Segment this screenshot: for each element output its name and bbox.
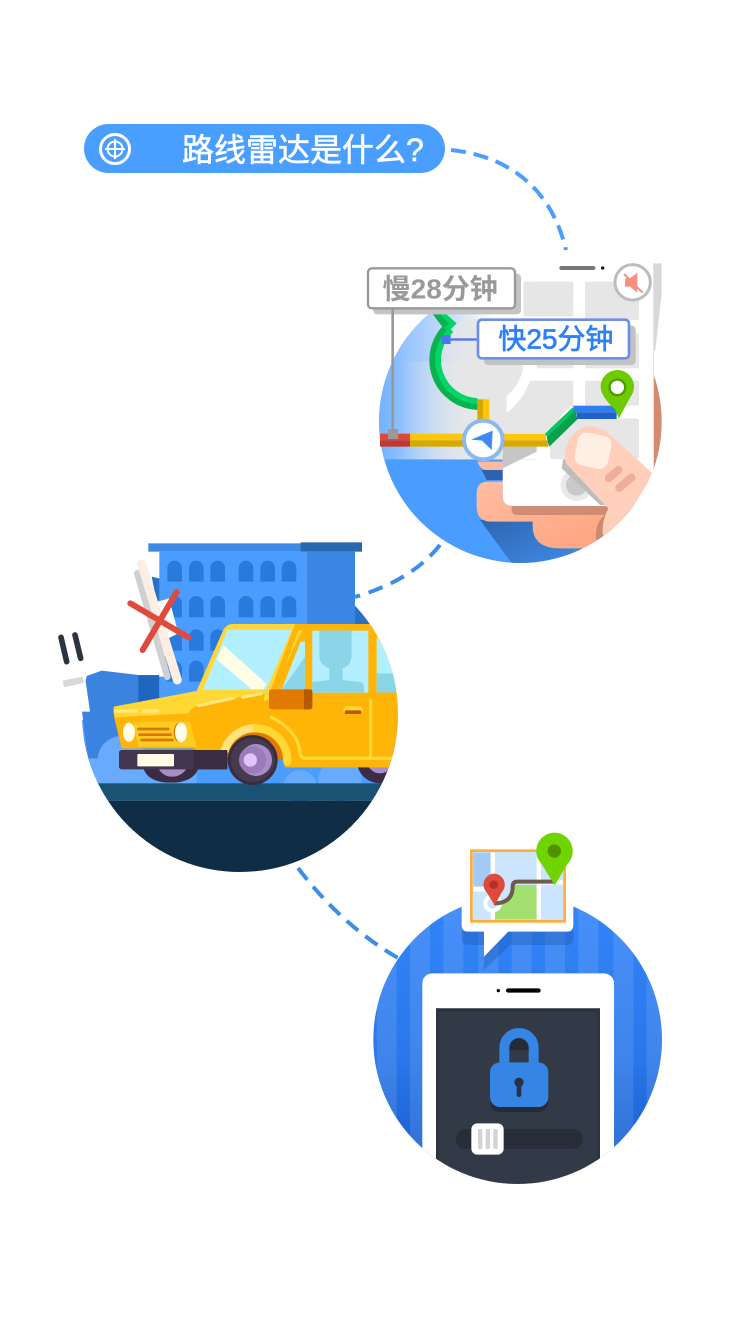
phone body	[422, 973, 614, 1207]
label: fast route	[442, 320, 636, 365]
hood highlights	[198, 694, 261, 706]
door lines	[270, 699, 400, 758]
dashed connector: title to navigation	[451, 150, 566, 250]
windshield	[203, 630, 292, 690]
wheel arch	[224, 728, 287, 762]
icon: navigation arrow	[464, 421, 503, 459]
dashed connector: navigation to car	[355, 545, 440, 597]
title text: 路线雷达是什么?	[182, 132, 424, 168]
dashed connector: car to lock screen	[298, 868, 398, 958]
white flag wedge	[157, 598, 178, 677]
grille	[138, 729, 173, 740]
panel: car in traffic	[50, 542, 417, 877]
grille frame	[133, 722, 197, 747]
map	[471, 851, 565, 921]
icon: destination pin	[601, 370, 634, 419]
label: slow route: 慢28分钟	[383, 274, 498, 305]
hand	[477, 426, 653, 548]
car body	[114, 624, 403, 767]
panel: lock screen	[370, 833, 667, 1207]
sign post	[137, 564, 177, 680]
rear wheels	[144, 742, 396, 784]
side windows and driver	[282, 642, 305, 690]
door handle	[343, 706, 363, 714]
bumper	[119, 750, 227, 769]
route	[380, 310, 617, 447]
icon: padlock	[490, 1033, 548, 1112]
background scene	[82, 606, 398, 872]
headlights	[123, 723, 135, 742]
phone speaker	[559, 266, 604, 270]
mirror	[269, 689, 312, 709]
unlock slider	[456, 1123, 583, 1155]
icon: radar target	[100, 134, 130, 164]
circle background	[377, 270, 667, 570]
label: fast route: 快25分钟	[498, 323, 613, 354]
phone screen	[436, 1008, 600, 1195]
striped circle	[373, 906, 662, 1184]
white phone bottom	[503, 447, 653, 506]
front wheel	[228, 735, 278, 785]
label: slow route	[368, 268, 521, 439]
icon: red pin	[484, 874, 505, 905]
outside phone edge shadow	[654, 263, 662, 350]
panel: navigation phone	[368, 263, 667, 570]
icon: mute	[615, 265, 650, 300]
phone speaker	[497, 988, 541, 993]
icon: green pin	[536, 833, 573, 885]
motion marks	[61, 635, 83, 684]
icon: red cross	[130, 592, 188, 650]
title pill	[84, 124, 445, 173]
building	[148, 542, 362, 698]
map blocks	[500, 282, 639, 433]
speech bubble with map	[462, 833, 573, 957]
bubble shadow	[462, 927, 573, 970]
car	[114, 624, 403, 785]
